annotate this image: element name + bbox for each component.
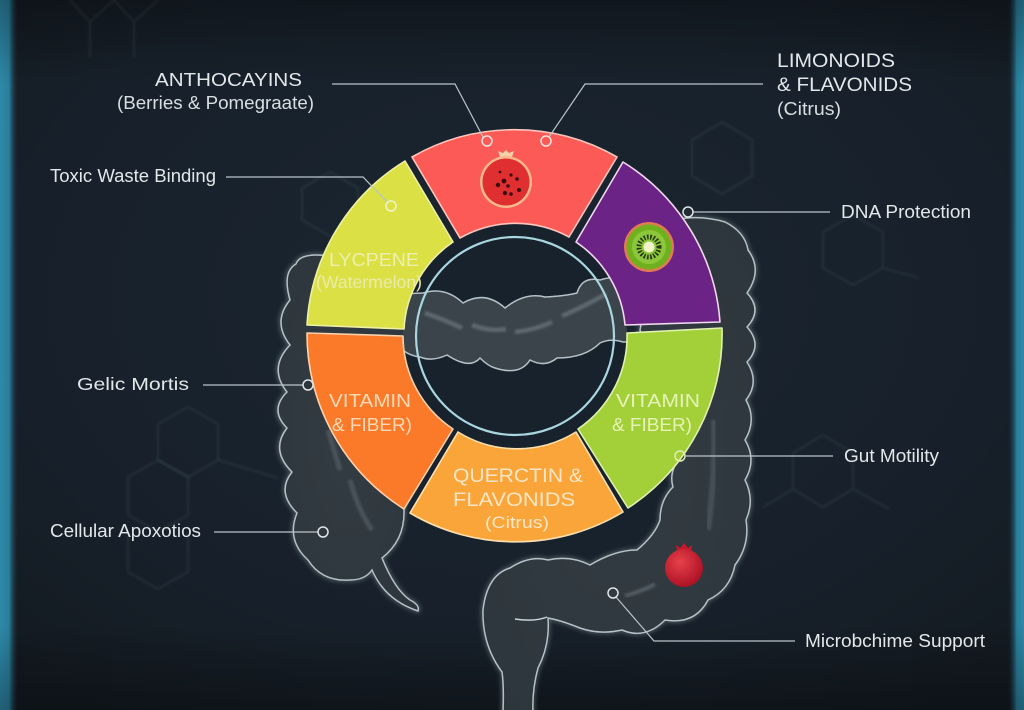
callout: limonoids and flavonoids: (Citrus)	[777, 99, 841, 119]
colon: ascending section with appendix	[278, 255, 420, 611]
segment: vitamin and fiber, lime	[578, 328, 722, 508]
callout: cellular apoptosis: Cellular Apoxotios	[50, 521, 201, 541]
segment: purple	[576, 162, 720, 325]
icon: whole pomegranate	[665, 543, 703, 587]
callout: limonoids and flavonoids: LIMONOIDS	[777, 50, 895, 72]
segment label: flavonoids: FLAVONIDS	[453, 489, 575, 511]
callout: anthocyanins: ANTHOCAYINS	[155, 69, 302, 90]
callout: gelic mortis: Gelic Mortis	[77, 374, 189, 394]
icon: kiwi slice	[624, 222, 674, 272]
callout: toxic waste binding	[50, 166, 396, 211]
colon: transverse section inside hub	[398, 278, 632, 371]
segment label: fiber left: & FIBER)	[332, 414, 412, 435]
callout: anthocyanins	[117, 69, 492, 146]
callout: anthocyanins: (Berries & Pomegraate)	[117, 93, 314, 113]
hub ring outline	[416, 237, 614, 435]
segment label: vitamin right: VITAMIN	[616, 390, 700, 411]
segment label: lycopene: LYCPENE	[329, 250, 419, 270]
callout: cellular apoptosis	[50, 521, 328, 541]
segment label: quercetin: QUERCTIN &	[453, 465, 583, 487]
callout: toxic waste binding: Toxic Waste Binding	[50, 166, 216, 186]
callout: gut motility	[675, 446, 939, 466]
segment: quercetin, amber	[410, 432, 623, 542]
faint molecule pattern	[70, 0, 919, 589]
icon: pomegranate slice	[480, 150, 532, 208]
callout: DNA protection	[683, 202, 971, 222]
colon: descending section and rectum	[483, 218, 755, 710]
callout: gut motility: Gut Motility	[844, 446, 939, 466]
dark hub behind ring	[403, 224, 627, 448]
donut chart of nutrient segments	[307, 130, 722, 542]
segment label: fiber right: & FIBER)	[612, 414, 692, 435]
callout: DNA protection: DNA Protection	[841, 202, 971, 222]
segment label: citrus: (Citrus)	[485, 513, 549, 532]
segment label: watermelon: (Watermelon)	[316, 272, 422, 292]
callout: microbiome support	[608, 588, 985, 651]
callout: gelic mortis	[77, 374, 313, 394]
segment: vitamin and fiber, orange	[307, 333, 453, 509]
segment: lycopene, yellow	[307, 161, 453, 329]
segment: anthocyanins, red	[412, 130, 617, 238]
callout: limonoids and flavonoids	[541, 50, 912, 146]
segment label: vitamin left: VITAMIN	[329, 390, 411, 411]
callout: microbiome support: Microbchime Support	[805, 631, 985, 651]
callout: limonoids and flavonoids: & FLAVONIDS	[777, 74, 912, 96]
